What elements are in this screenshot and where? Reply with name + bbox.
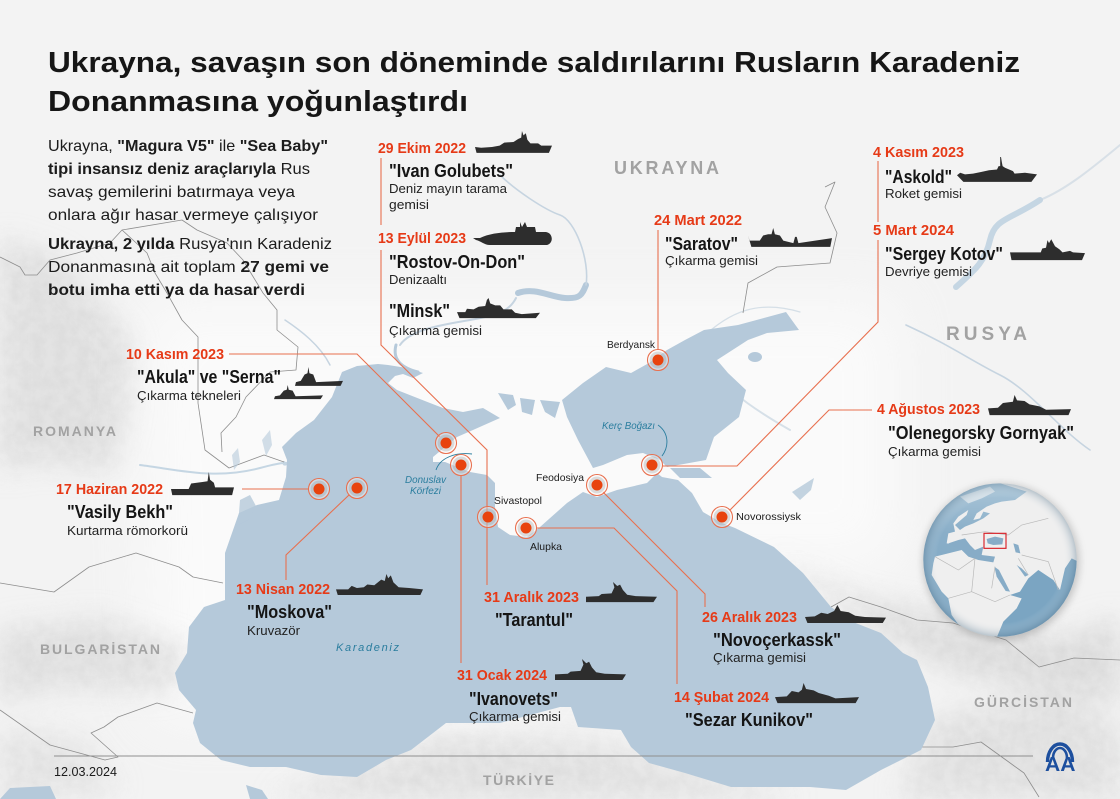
- label: Rostov-On-Don: Denizaaltı: [389, 272, 447, 287]
- label: Ivan Golubets: Deniz mayın tarama: [389, 181, 508, 196]
- country labels: RUSYA: [946, 324, 1027, 345]
- label: Novoçerkassk: 26 Aralık 2023: [702, 610, 797, 626]
- intro text: savaş gemilerini batırmaya veya: [48, 184, 295, 201]
- attack markers: [308, 350, 732, 538]
- footer rule: [54, 755, 1033, 757]
- logo: AA: [1045, 744, 1076, 776]
- label: Akula ve Serna: 10 Kasım 2023: [126, 347, 224, 363]
- label: Olenegorsky Gornyak: 4 Ağustos 2023: [877, 402, 980, 418]
- Sea of Azov: [562, 312, 799, 468]
- label: Askold: 4 Kasım 2023: [873, 145, 964, 161]
- label: Ivanovets: [457, 659, 626, 724]
- place labels: Sivastopol: [494, 495, 542, 507]
- rivers and reservoirs: [140, 145, 1120, 474]
- globe locator box: [984, 533, 1006, 548]
- label: Rostov-On-Don: "Rostov-On-Don": [389, 252, 525, 272]
- label: Vasily Bekh: [56, 472, 234, 538]
- label: Ivanovets: "Ivanovets": [469, 689, 558, 709]
- label: Tarantul: [484, 582, 657, 630]
- title: [48, 47, 1020, 118]
- label: Olenegorsky Gornyak: Çıkarma gemisi: [888, 444, 981, 459]
- label: Tarantul: "Tarantul": [495, 610, 573, 630]
- label: Ivan Golubets: [378, 131, 552, 212]
- country labels: BULGARİSTAN: [40, 641, 160, 657]
- Black Sea: [175, 364, 935, 790]
- place labels: Novorossiysk: [736, 511, 802, 523]
- leader lines: [229, 158, 878, 684]
- label: Akula ve Serna: "Akula" ve "Serna": [137, 367, 281, 387]
- country labels: GÜRCİSTAN: [974, 694, 1072, 710]
- country labels: UKRAYNA: [614, 158, 719, 178]
- small waters: [0, 352, 814, 799]
- label: Novoçerkassk: "Novoçerkassk": [713, 630, 841, 650]
- label: Vasily Bekh: "Vasily Bekh": [67, 502, 173, 522]
- intro text: botu imha etti ya da hasar verdi: [48, 282, 305, 299]
- label: Tarantul: 31 Aralık 2023: [484, 590, 579, 606]
- place labels: Feodosiya: [536, 472, 584, 484]
- label: Vasily Bekh: Kurtarma römorkorü: [67, 523, 188, 538]
- label: Ivan Golubets: gemisi: [389, 197, 429, 212]
- label: Ivanovets: Çıkarma gemisi: [469, 709, 561, 724]
- date: 12.03.2024: [54, 765, 117, 779]
- label: Sezar Kunikov: "Sezar Kunikov": [685, 710, 813, 730]
- logo: AA: AA: [1045, 754, 1076, 776]
- country labels: TÜRKİYE: [483, 772, 554, 788]
- label: Rostov-On-Don: 13 Eylül 2023: [378, 231, 466, 247]
- label: Vasily Bekh: 17 Haziran 2022: [56, 482, 163, 498]
- label: Ivan Golubets: 29 Ekim 2022: [378, 141, 466, 157]
- intro text: Donanmasına ait toplam 27 gemi ve: [48, 259, 329, 276]
- label: Saratov: "Saratov": [665, 234, 738, 254]
- label: Askold: "Askold": [885, 167, 952, 187]
- intro text: [48, 138, 332, 299]
- label: Sergey Kotov: [873, 223, 1085, 279]
- label: Ivanovets: 31 Ocak 2024: [457, 668, 547, 684]
- label: Rostov-On-Don: [378, 222, 552, 287]
- borders: [0, 182, 1120, 797]
- label: Sergey Kotov: "Sergey Kotov": [885, 244, 1003, 264]
- place labels: Kerç Boğazı: [602, 420, 655, 432]
- label: Moskova: [236, 574, 423, 638]
- label: Minsk: Çıkarma gemisi: [389, 323, 482, 338]
- label: Moskova: 13 Nisan 2022: [236, 582, 330, 598]
- place labels: Donuslav: [405, 474, 447, 486]
- label: Ivan Golubets: "Ivan Golubets": [389, 161, 513, 181]
- label: Sezar Kunikov: [674, 683, 859, 730]
- label: Minsk: [389, 298, 540, 338]
- intro text: tipi insansız deniz araçlarıyla Rus: [48, 161, 310, 178]
- label: Sergey Kotov: 5 Mart 2024: [873, 223, 954, 239]
- label: Novoçerkassk: [702, 605, 886, 665]
- label: Olenegorsky Gornyak: [877, 395, 1074, 459]
- place labels: Körfezi: [410, 485, 442, 497]
- label: Moskova: Kruvazör: [247, 623, 301, 638]
- place labels: [336, 339, 802, 654]
- country labels: [33, 158, 1072, 788]
- label: Akula ve Serna: Çıkarma tekneleri: [137, 388, 241, 403]
- label: Sezar Kunikov: 14 Şubat 2024: [674, 690, 769, 706]
- intro text: Ukrayna, "Magura V5" ile "Sea Baby": [48, 138, 328, 155]
- label: Askold: [873, 145, 1037, 201]
- label: Moskova: "Moskova": [247, 602, 332, 622]
- place labels: Berdyansk: [607, 339, 656, 351]
- title: Donanmasına yoğunlaştırdı: [48, 86, 468, 118]
- title: Ukrayna, savaşın son döneminde saldırılarını Rusların Karadeniz: [48, 47, 1020, 79]
- water arrows: [436, 425, 667, 470]
- locator globe: [915, 475, 1079, 642]
- label: Novoçerkassk: Çıkarma gemisi: [713, 650, 806, 665]
- label: Olenegorsky Gornyak: "Olenegorsky Gornyak": [888, 423, 1074, 443]
- label: Saratov: 24 Mart 2022: [654, 213, 742, 229]
- country labels: ROMANYA: [33, 423, 116, 439]
- label: Saratov: Çıkarma gemisi: [665, 253, 758, 268]
- label: Minsk: "Minsk": [389, 301, 450, 321]
- label: Askold: Roket gemisi: [885, 186, 962, 201]
- label: Saratov: [654, 213, 832, 268]
- label: Akula ve Serna: [126, 347, 343, 403]
- intro text: Ukrayna, 2 yılda Rusya'nın Karadeniz: [48, 236, 332, 253]
- intro text: onlara ağır hasar vermeye çalışıyor: [48, 207, 319, 224]
- label: Sergey Kotov: Devriye gemisi: [885, 264, 972, 279]
- place labels: Karadeniz: [336, 642, 400, 654]
- place labels: Alupka: [530, 541, 562, 553]
